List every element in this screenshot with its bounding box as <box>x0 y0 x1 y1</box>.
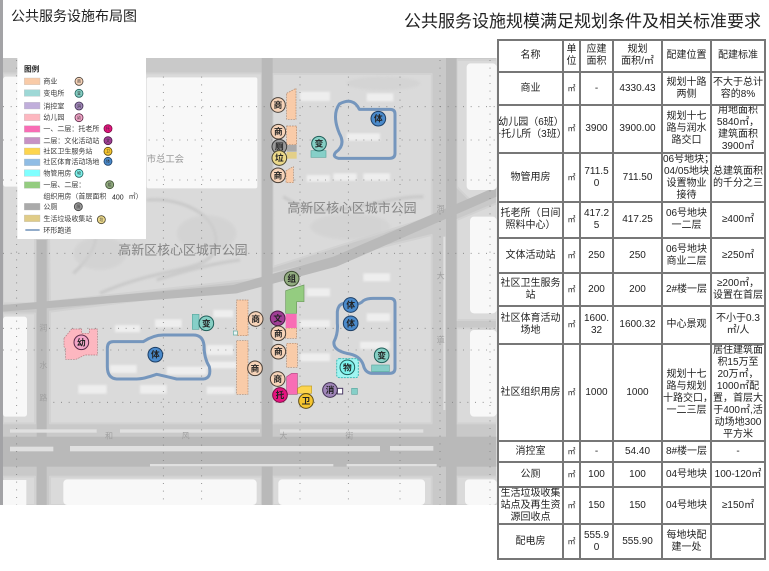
darker road carriageways <box>3 58 497 505</box>
row: public toilet: ㎡ <box>568 470 576 478</box>
legend markers: 垃 <box>99 216 103 222</box>
row: commercial: 规划十路 <box>666 76 706 88</box>
elderly care plot <box>287 373 297 394</box>
marker: commercial <box>271 124 286 139</box>
marker: commercial: 商 <box>274 99 283 110</box>
row: community organisation: 20万㎡， <box>717 368 759 380</box>
row: fire control room: 消控室 <box>516 446 546 456</box>
row: culture station: 06号地块 <box>666 244 707 254</box>
marker: substation: 变 <box>315 138 324 149</box>
marker: substation <box>312 136 326 151</box>
row: health station: ≥200㎡， <box>717 278 759 288</box>
marker: property management: 物 <box>343 361 352 372</box>
row: elderly care: 417.25 <box>622 214 653 225</box>
marker: elderly care: 托 <box>276 389 285 400</box>
table header row: 名称 <box>520 50 540 61</box>
row: refuse collection: 04号地块 <box>666 500 707 510</box>
row: public toilet: 公厕 <box>520 468 540 480</box>
row: sports ground: 场地 <box>520 325 540 336</box>
row: community organisation: 居住建筑面 <box>713 344 763 356</box>
legend markers: 厕 <box>76 203 80 209</box>
legend labels: 幼儿园 <box>43 113 64 122</box>
road name labels: 润 <box>437 204 445 214</box>
legend markers: 商 <box>77 78 81 84</box>
title: layout map: 公共服务设施布局图 <box>11 8 137 24</box>
row: community organisation <box>500 344 763 440</box>
running track: lower left <box>107 335 210 379</box>
row: kindergarten: 路交口 <box>672 135 702 146</box>
row: health station: 设置在首层 <box>713 290 763 300</box>
row: kindergarten <box>498 105 759 152</box>
legend labels: ㎡） <box>129 193 143 201</box>
row: commercial <box>520 76 763 100</box>
table header row: 面积/㎡ <box>621 56 654 67</box>
marker: commercial <box>271 344 286 359</box>
row: property management: 设置物业 <box>666 178 706 188</box>
marker: health station <box>299 394 313 408</box>
row: commercial: 4330.43 <box>619 82 656 94</box>
marker: community organisation <box>284 271 299 286</box>
marker: commercial <box>271 98 285 112</box>
public toilet plot <box>287 145 297 152</box>
legend labels: 环形跑道 <box>43 225 71 234</box>
table header row: 配建位置 <box>666 50 706 61</box>
cultural activity station plot <box>286 314 297 328</box>
marker: commercial <box>270 372 285 386</box>
row: elderly care <box>500 207 754 231</box>
white plots around the site <box>3 63 497 505</box>
legend markers: 卫 <box>106 149 110 154</box>
road name labels: 大 <box>279 431 287 441</box>
marker: commercial: 商 <box>274 169 283 180</box>
row: community organisation: 1000 <box>626 386 649 398</box>
row: health station: 2#楼一层 <box>666 284 707 294</box>
row: power distribution room: 555.9 <box>584 530 609 540</box>
marker: commercial <box>271 168 285 183</box>
legend markers: 变 <box>77 90 81 96</box>
row: culture station <box>506 243 754 266</box>
row: community organisation: 规划十七 <box>666 368 706 380</box>
map label: city park centre: 高新区核心区城市公园 <box>118 243 248 258</box>
left page edge strip <box>0 0 3 505</box>
marker: substation <box>199 316 214 331</box>
row: power distribution room: 建一处 <box>672 542 702 552</box>
legend heading: 图例 <box>24 64 40 74</box>
table header row: 单 <box>566 44 576 55</box>
row: sports ground: 1600. <box>584 313 609 324</box>
row: community organisation: 社区组织用房 <box>500 386 560 398</box>
row: commercial: 两侧 <box>676 88 696 100</box>
marker: kindergarten: 幼 <box>77 336 86 347</box>
road name labels: 路 <box>39 393 47 403</box>
row: culture station: ≥250㎡ <box>722 250 754 260</box>
row: refuse collection <box>500 488 754 522</box>
legend markers: 体 <box>106 158 110 164</box>
row: sports ground: ㎡/人 <box>727 325 749 336</box>
row: power distribution room: 每地块配 <box>666 530 706 540</box>
row: culture station: ㎡ <box>568 250 576 260</box>
kindergarten plot <box>64 329 97 359</box>
row: refuse collection: 源回收点 <box>510 512 550 522</box>
row: culture station: 250 <box>629 250 646 260</box>
legend labels: 变电所 <box>43 88 64 97</box>
row: kindergarten: 3900㎡ <box>722 141 754 152</box>
marker: community organisation: 组 <box>287 273 296 284</box>
substation plots <box>192 151 389 394</box>
road name labels: 和 <box>105 432 113 441</box>
marker: elderly care <box>273 388 287 402</box>
row: sports ground: 32 <box>591 325 602 336</box>
row: elderly care: 5 <box>594 220 599 231</box>
row: fire control room: - <box>595 446 598 456</box>
row: kindergarten: 3900 <box>585 123 608 134</box>
row: power distribution room: 配电房 <box>516 536 546 546</box>
marker: commercial: 商 <box>273 373 282 384</box>
map label: city trade union: 市总工会 <box>147 153 184 164</box>
row: elderly care: 06号地块 <box>666 208 707 219</box>
row: sports ground: ㎡ <box>568 320 576 329</box>
road name labels: 风 <box>182 432 190 441</box>
row: refuse collection: 生活垃圾收集 <box>500 488 560 498</box>
row: commercial: 容的8% <box>721 88 755 100</box>
marker: substation: 变 <box>202 317 211 328</box>
community organisation plot <box>286 285 304 313</box>
row: property management: 接待 <box>676 190 696 200</box>
row: commercial: ㎡ <box>568 84 576 92</box>
row: property management: 物管用房 <box>510 172 550 182</box>
map markers <box>74 98 389 408</box>
legend labels: 社区体育活动场地 <box>43 157 99 166</box>
table header row: 规划 <box>628 44 648 55</box>
table header row <box>520 43 758 67</box>
running track: upper right <box>334 101 395 158</box>
row: community organisation: 路与规划 <box>666 380 706 392</box>
row: community organisation: 积15万至 <box>717 356 759 368</box>
health station plot <box>298 386 312 393</box>
legend labels: 组织用房（首层面积 <box>43 192 106 201</box>
row: fire control room: - <box>736 446 740 456</box>
legend markers: 托 <box>106 125 110 131</box>
row: property management <box>510 154 763 200</box>
row: health station: 站 <box>526 290 536 300</box>
row: sports ground <box>500 312 760 336</box>
row: health station: 200 <box>629 284 646 294</box>
row: property management: 711.50 <box>623 172 652 182</box>
row: commercial: 商业 <box>520 82 540 94</box>
table header row: 应建 <box>586 44 606 55</box>
legend labels <box>43 77 143 234</box>
row: community organisation: ㎡ <box>568 388 576 396</box>
row: health station <box>500 276 763 300</box>
row: fire control room: 8#楼一层 <box>666 446 707 456</box>
marker: sports: 体 <box>346 299 355 310</box>
row: culture station: 250 <box>588 250 605 260</box>
legend run track line <box>25 228 40 232</box>
running track: lower right <box>334 298 395 373</box>
row: health station: ㎡ <box>568 284 576 294</box>
marker: commercial: 商 <box>274 346 283 357</box>
refuse collection plot <box>287 152 297 159</box>
marker: property management <box>340 360 355 375</box>
residential buildings <box>78 92 393 394</box>
row: public toilet: 100-120㎡ <box>715 468 761 480</box>
row: kindergarten: 5840㎡， <box>717 117 759 128</box>
legend labels: 消控室 <box>43 102 64 111</box>
row: health station: 社区卫生服务 <box>500 278 560 288</box>
marker: commercial: 商 <box>251 313 260 324</box>
row: sports ground: 社区体育活动 <box>500 313 560 324</box>
marker: sports <box>343 298 358 312</box>
row: property management: 的千分之三 <box>713 178 763 188</box>
row: kindergarten: 用地面积 <box>718 105 758 116</box>
row: community organisation: 一二三层 <box>666 404 706 416</box>
legend markers: 文 <box>106 137 110 143</box>
map label: city park upper right: 高新区核心区城市公园 <box>287 201 417 216</box>
row: refuse collection: 站点及再生资 <box>500 500 560 510</box>
marker: fire control <box>323 383 337 397</box>
row: community organisation: 于400㎡,活 <box>713 404 763 416</box>
legend labels: 一层、二层： <box>43 181 85 189</box>
row: community organisation: 置，首层大 <box>713 392 763 404</box>
row: elderly care: 照料中心） <box>506 220 556 231</box>
row: public toilet: 100 <box>629 468 646 480</box>
row: kindergarten: ㎡ <box>568 124 576 133</box>
row: fire control room: ㎡ <box>568 446 576 456</box>
legend labels: 社区卫生服务站 <box>43 146 92 155</box>
marker: commercial <box>248 361 262 376</box>
row: culture station: 商业二层 <box>666 256 706 266</box>
row: public toilet: 100 <box>588 468 605 480</box>
row: refuse collection: 150 <box>588 500 605 510</box>
road lane strips <box>10 237 445 466</box>
marker: refuse <box>272 151 287 165</box>
table header row: 配建标准 <box>718 50 758 61</box>
legend swatches <box>24 78 40 222</box>
row: kindergarten: 路与润水 <box>666 123 706 134</box>
marker: substation <box>374 348 389 363</box>
legend labels: 物管用房 <box>43 168 71 177</box>
marker: toilet <box>272 139 287 154</box>
marker: kindergarten <box>74 335 89 350</box>
row: property management: 711.5 <box>584 166 609 176</box>
legend labels: 一、二层：托老所 <box>43 124 99 133</box>
row: elderly care: 一二层 <box>672 220 702 231</box>
row: fire control room <box>516 445 740 456</box>
marker: commercial: 商 <box>274 327 283 338</box>
row: refuse collection: ≥150㎡ <box>722 500 754 510</box>
legend markers: 幼 <box>77 114 81 120</box>
marker: fire control: 消 <box>326 384 335 395</box>
legend labels: 公厕 <box>43 203 57 211</box>
table header row: 面积 <box>586 56 606 67</box>
row: sports ground: 不小于0.3 <box>716 313 760 324</box>
marker: sports <box>148 347 163 362</box>
row: refuse collection: 150 <box>629 500 646 510</box>
marker: commercial: 商 <box>274 126 283 137</box>
row: community organisation: 平方米 <box>723 428 753 440</box>
marker: toilet: 厕 <box>275 142 284 152</box>
row: community organisation: 1000 <box>585 386 608 398</box>
marker: sports: 体 <box>151 349 160 360</box>
park texture <box>60 193 423 293</box>
row: culture station: 文体活动站 <box>506 250 556 260</box>
road name labels <box>39 204 445 441</box>
row: commercial: 不大于总计 <box>713 76 763 88</box>
row: property management: 0 <box>594 178 599 188</box>
marker: sports <box>371 111 386 126</box>
row: kindergarten: 3900.00 <box>619 123 656 134</box>
site plan map <box>3 58 497 505</box>
legend labels: 商业 <box>43 77 57 86</box>
row: public toilet <box>520 468 762 480</box>
commercial plots <box>237 88 297 394</box>
legend labels: 生活垃圾收集站 <box>43 214 92 223</box>
road name labels: 大 <box>437 270 445 280</box>
road name labels: 水 <box>39 360 47 370</box>
fire control room plot <box>337 388 343 394</box>
marker: cultural station: 文 <box>273 312 282 323</box>
road name labels: 道 <box>437 335 445 345</box>
row: elderly care: 417.2 <box>584 208 609 219</box>
legend markers: 组 <box>108 181 112 187</box>
legend labels: 二层：文化活动站 <box>43 136 99 145</box>
row: community organisation: 动场地300 <box>715 416 761 428</box>
row: property management: ㎡ <box>568 172 576 182</box>
row: property management: 04/05地块 <box>664 166 709 176</box>
marker: refuse: 垃 <box>275 152 284 163</box>
facility standards table <box>497 39 766 560</box>
row: health station: 200 <box>588 284 605 294</box>
road name labels: 街 <box>345 431 353 441</box>
row: power distribution room: 555.90 <box>622 536 653 546</box>
legend labels: 400 <box>112 194 124 201</box>
row: sports ground: 1600.32 <box>619 319 656 330</box>
property management plot <box>337 359 358 378</box>
road name labels: 润 <box>39 323 47 333</box>
legend markers: 物 <box>77 170 81 176</box>
row: power distribution room: 0 <box>594 542 599 552</box>
row: power distribution room: ㎡ <box>568 536 576 546</box>
row: commercial: - <box>595 82 598 94</box>
table header row: 位 <box>566 56 576 67</box>
marker: commercial <box>271 326 286 341</box>
base map <box>3 58 497 507</box>
marker: commercial <box>248 312 263 326</box>
row: kindergarten: 幼儿园（6班） <box>498 117 563 128</box>
marker: sports <box>343 316 358 331</box>
marker: sports: 体 <box>346 317 355 328</box>
legend markers: 消 <box>77 102 81 108</box>
marker: commercial: 商 <box>251 362 260 373</box>
row: elderly care: ㎡ <box>568 215 576 224</box>
title: scale requirements: 公共服务设施规模满足规划条件及相关标准要求 <box>404 12 761 31</box>
row: elderly care: 托老所（日间 <box>500 208 560 219</box>
row: power distribution room <box>516 529 706 552</box>
plot grid dots <box>3 60 497 507</box>
row: kindergarten: 规划十七 <box>666 111 706 122</box>
row: fire control room: 54.40 <box>625 446 650 456</box>
row: kindergarten: 建筑面积 <box>718 129 758 140</box>
row: community organisation: 1000㎡配 <box>717 380 759 392</box>
marker: cultural station <box>270 311 285 326</box>
row: refuse collection: ㎡ <box>568 500 576 510</box>
row: property management: 总建筑面积 <box>713 166 763 176</box>
legend panel <box>17 58 146 239</box>
row: public toilet: 04号地块 <box>666 468 707 480</box>
marker: substation: 变 <box>377 349 386 360</box>
marker: health station: 卫 <box>302 396 311 406</box>
marker: sports: 体 <box>374 113 383 124</box>
legend markers <box>74 77 114 224</box>
row: elderly care: ≥400㎡ <box>722 214 754 225</box>
row: sports ground: 中心景观 <box>666 319 706 330</box>
